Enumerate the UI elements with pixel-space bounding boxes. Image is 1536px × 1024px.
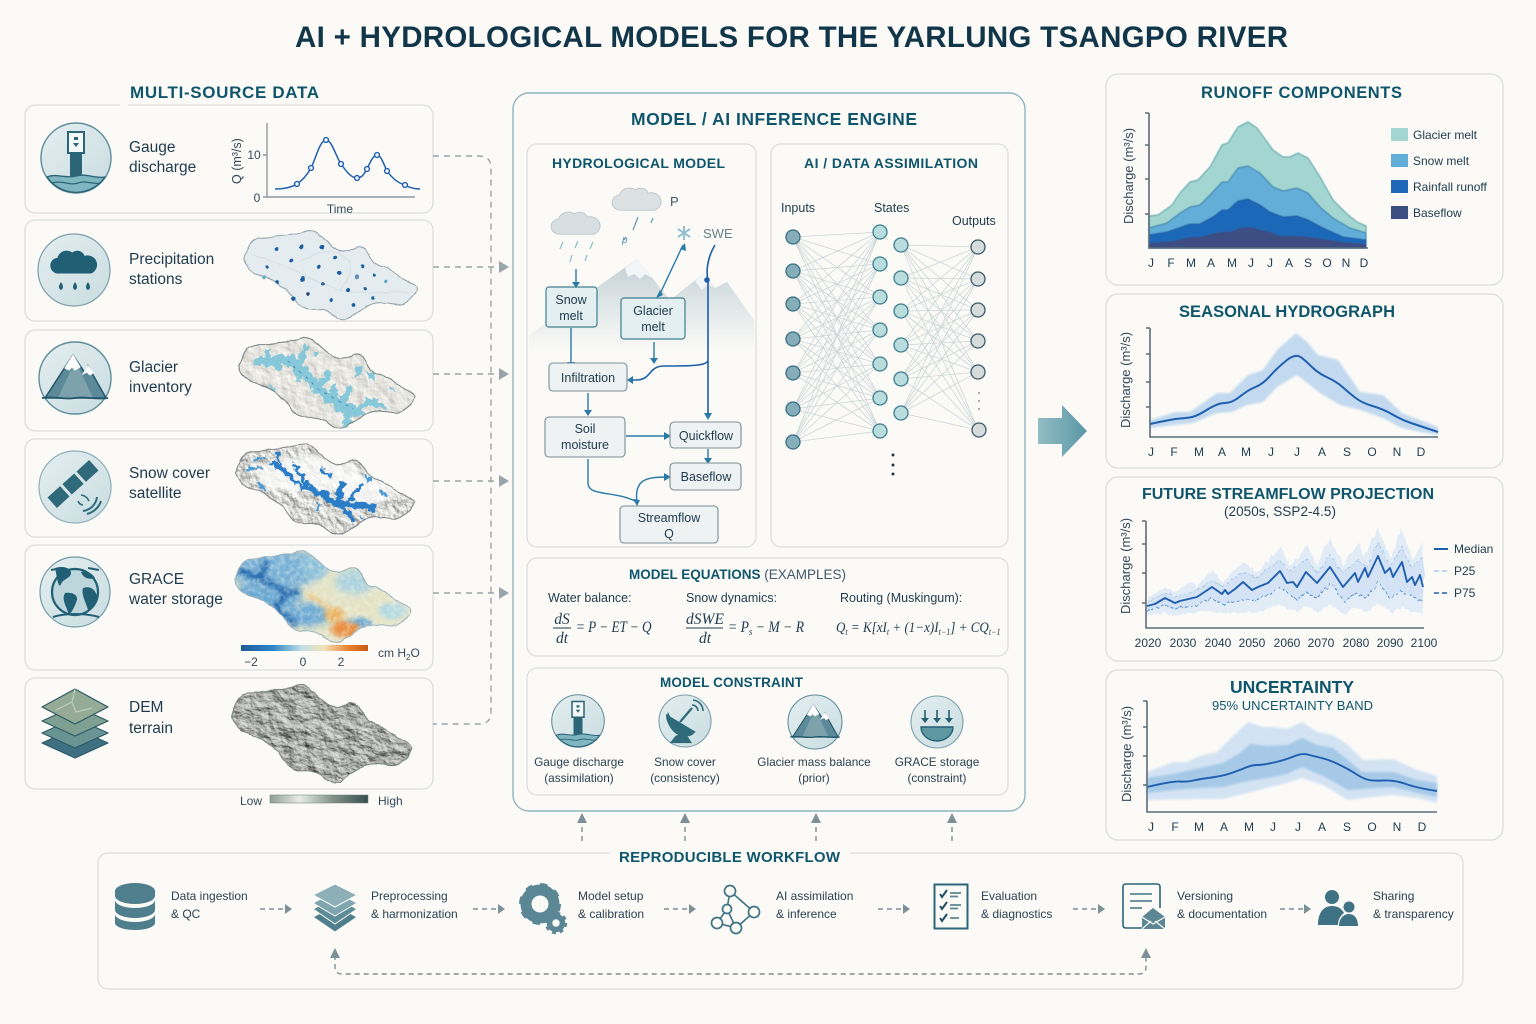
panel: uncertainty (1106, 670, 1503, 840)
chart: uncertainty bands: M (1244, 820, 1254, 834)
chart: projection: 2090 (1377, 636, 1404, 650)
chart: hydrograph with band: S (1343, 445, 1351, 459)
box: streamflow: Streamflow (638, 511, 700, 525)
box: baseflow: Baseflow (681, 470, 732, 484)
chart: stacked runoff area: N (1342, 256, 1350, 270)
subtitle: band: 95% UNCERTAINTY BAND (1212, 698, 1373, 713)
arrow (1280, 904, 1311, 914)
label: snow cover satellite: satellite (129, 485, 182, 502)
step: data ingestion: Data ingestion (171, 889, 248, 903)
box: streamflow (620, 506, 718, 543)
legend: runoff: Baseflow (1413, 206, 1462, 220)
equation: routing: + (1−x)I (889, 619, 940, 636)
label: precipitation stations: Precipitation (129, 251, 214, 268)
step: versioning: Versioning (1177, 889, 1233, 903)
step: model setup: Model setup (578, 889, 643, 903)
label: inputs: Inputs (781, 201, 815, 215)
chart: stacked runoff area: O (1322, 256, 1332, 270)
constraint: glacier mass balance: (prior) (798, 771, 830, 785)
heading: equations: MODEL EQUATIONS (EXAMPLES) (629, 567, 846, 582)
chart: hydrograph with band: M (1241, 445, 1251, 459)
chart: uncertainty bands: A (1318, 820, 1326, 834)
heading: workflow: REPRODUCIBLE WORKFLOW (619, 849, 841, 866)
chart: hydrograph with band: N (1393, 445, 1401, 459)
chart: uncertainty bands: M (1194, 820, 1204, 834)
constraint: gauge discharge (534, 695, 624, 785)
heading: future projection: FUTURE STREAMFLOW PROJECTION (1142, 486, 1434, 503)
box: quickflow (670, 422, 741, 448)
legend: runoff: Glacier melt (1413, 128, 1478, 142)
icon: cloud right (612, 188, 661, 210)
equation: routing: ] + CQ (949, 619, 989, 635)
label: small p: p (621, 235, 628, 246)
step: evaluation (934, 884, 1052, 928)
icon: globe (40, 557, 110, 627)
map: GRACE anomaly (234, 550, 412, 644)
icon: snowflake (678, 226, 690, 240)
label: DEM terrain: DEM (129, 699, 163, 716)
chart: hydrograph with band: J (1268, 445, 1274, 459)
legend: runoff: Rainfall runoff (1413, 180, 1487, 194)
constraint: GRACE storage: GRACE storage (895, 755, 979, 769)
panel: hydrological model (527, 144, 756, 547)
heading: hydrological model: HYDROLOGICAL MODEL (552, 155, 725, 171)
chart: hydrograph with band: F (1170, 445, 1178, 459)
colorbar: GRACE: 0 (300, 655, 307, 669)
step: preprocessing: & harmonization (371, 907, 458, 921)
chart: hydrograph with band: Discharge (m³/s) (1118, 332, 1133, 428)
equation: water balance (548, 591, 652, 647)
chart: stacked runoff area: A (1207, 256, 1215, 270)
card: DEM terrain (25, 678, 433, 789)
chart: stacked runoff area: Discharge (m³/s) (1121, 128, 1136, 224)
chart: uncertainty bands: J (1148, 820, 1154, 834)
colorbar: GRACE: −2 (244, 655, 258, 669)
constraint: gauge discharge: (assimilation) (544, 771, 614, 785)
box: infiltration (549, 363, 627, 391)
illustration: mountains (529, 259, 754, 352)
chart: projection: 2020 (1135, 636, 1162, 650)
equation: routing: Routing (Muskingum): (840, 591, 962, 605)
arrow: feedback loop (330, 948, 1151, 974)
chart: hydrograph with band: A (1318, 445, 1326, 459)
constraint: glacier mass balance (757, 695, 871, 785)
box: glacier melt: Glacier (633, 304, 673, 318)
legend: projection: P25 (1454, 564, 1476, 578)
chart: projection: 2080 (1343, 636, 1370, 650)
equation: routing: t (887, 627, 890, 637)
heading: multi-source data: MULTI-SOURCE DATA (130, 83, 319, 102)
equation: routing (836, 591, 1001, 637)
card: snow cover satellite (25, 439, 433, 540)
chart: stacked runoff area: J (1248, 256, 1254, 270)
legend: runoff: Snow melt (1413, 154, 1470, 168)
colorbar: GRACE (241, 645, 420, 669)
icon: cloud left (551, 212, 600, 234)
colorbar: GRACE: O (410, 646, 420, 660)
chart: projection: Discharge (m³/s) (1118, 518, 1133, 614)
box: snow melt (546, 287, 597, 327)
map: DEM (230, 683, 417, 788)
map: precipitation stations (244, 231, 417, 320)
chart: projection: 2100 (1411, 636, 1438, 650)
constraint: snow cover (650, 695, 720, 785)
chart: uncertainty bands: S (1343, 820, 1351, 834)
illustration: snow caps (625, 259, 714, 290)
chart: stacked runoff area (1121, 113, 1369, 270)
chart: gauge hydrograph: Q (m³/s) (230, 138, 244, 184)
chart: hydrograph with band: M (1194, 445, 1204, 459)
box: glacier melt (621, 298, 685, 339)
constraint: gauge discharge: Gauge discharge (534, 755, 624, 769)
equation: snow dynamics (686, 591, 804, 647)
equation: snow dynamics: Snow dynamics: (686, 591, 777, 605)
label: P: P (670, 194, 679, 209)
chart: stacked runoff area: S (1304, 256, 1312, 270)
flow arrowheads (567, 243, 712, 506)
label: GRACE water storage: GRACE (129, 571, 184, 588)
node: SWE junction (704, 277, 710, 283)
map: snow cover (234, 442, 419, 540)
panel: model equations (527, 558, 1008, 656)
chart: uncertainty bands: A (1220, 820, 1228, 834)
icon: satellite (39, 451, 111, 523)
equation: water balance: dt (556, 630, 569, 647)
map: glacier extent (237, 336, 420, 434)
chart: projection: 2050 (1239, 636, 1266, 650)
icon: rain left (560, 241, 593, 262)
title: AI + HYDROLOGICAL MODELS FOR THE YARLUNG TSANGPO RIVER (295, 21, 1288, 54)
chart: uncertainty bands: O (1367, 820, 1377, 834)
label: gauge discharge: discharge (129, 159, 196, 176)
equation: snow dynamics: s (749, 628, 753, 638)
step: versioning (1123, 884, 1267, 929)
chart: stacked runoff area: J (1148, 256, 1154, 270)
equation: routing: t (845, 627, 848, 637)
chart: hydrograph with band (1118, 328, 1438, 459)
label: snow cover satellite: Snow cover (129, 465, 210, 482)
label: glacier inventory: inventory (129, 379, 192, 396)
heading: seasonal hydrograph: SEASONAL HYDROGRAPH (1179, 303, 1395, 321)
arrows: workflow to engine (577, 813, 957, 841)
chart: uncertainty bands: D (1418, 820, 1427, 834)
chart: stacked runoff area: M (1186, 256, 1196, 270)
panel: model / AI inference engine (513, 93, 1025, 811)
chart: hydrograph with band: D (1417, 445, 1426, 459)
icon: mountains (39, 342, 111, 414)
box: baseflow (670, 463, 741, 490)
panel: seasonal hydrograph (1106, 294, 1503, 468)
arrow (473, 904, 505, 914)
step: model setup: & calibration (578, 907, 644, 921)
box: soil moisture (545, 417, 625, 457)
icon: rain right (624, 217, 653, 240)
chart: projection: 2070 (1308, 636, 1335, 650)
colorbar: GRACE: 2 (406, 653, 411, 662)
step: evaluation: & diagnostics (981, 907, 1052, 921)
icon: rain cloud (38, 234, 110, 306)
box: streamflow: Q (664, 527, 674, 541)
card: GRACE water storage (25, 545, 433, 670)
equation: snow dynamics: dt (699, 630, 712, 647)
step: sharing: & transparency (1373, 907, 1454, 921)
arrows: data to model connectors (433, 156, 509, 724)
chart: hydrograph with band: J (1148, 445, 1154, 459)
heading: inference engine: MODEL / AI INFERENCE ENGINE (631, 109, 917, 129)
chart: stacked runoff area: M (1227, 256, 1237, 270)
equation: water balance: Water balance: (548, 591, 632, 605)
step: data ingestion: & QC (171, 907, 201, 921)
colorbar: GRACE: cm H (378, 646, 406, 660)
card: glacier inventory (25, 330, 433, 434)
step: sharing (1318, 889, 1454, 926)
panel: runoff components (1106, 74, 1503, 285)
panel: reproducible workflow (98, 848, 1463, 989)
legend: elevation: Low (240, 794, 262, 808)
equation: routing: t−1 (989, 627, 1001, 637)
chart: uncertainty bands: J (1295, 820, 1301, 834)
icon: gauge (41, 123, 111, 193)
legend: projection (1434, 542, 1493, 600)
legend: projection: Median (1454, 542, 1493, 556)
label: outputs: Outputs (952, 214, 996, 228)
box: snow melt: Snow (555, 293, 587, 307)
chart: hydrograph with band: A (1218, 445, 1226, 459)
chart: uncertainty bands: F (1171, 820, 1179, 834)
chart: stacked runoff area: A (1285, 256, 1293, 270)
step: evaluation: Evaluation (981, 889, 1037, 903)
legend: elevation: High (378, 794, 403, 808)
chart: gauge hydrograph: 10 (247, 148, 261, 162)
equation: snow dynamics: − M − R (752, 619, 804, 636)
panel: AI / data assimilation (771, 144, 1008, 547)
step: preprocessing (313, 884, 458, 932)
equation: routing: t−1 (939, 627, 950, 637)
chart: stacked runoff area: F (1167, 256, 1175, 270)
heading: runoff components: RUNOFF COMPONENTS (1201, 84, 1402, 102)
constraint: snow cover: (consistency) (650, 771, 720, 785)
colorbar: GRACE: 2 (338, 655, 345, 669)
label: states: States (874, 201, 909, 215)
equation: water balance: dS (554, 611, 570, 628)
label: DEM terrain: terrain (129, 720, 173, 737)
card: precipitation stations (25, 220, 433, 321)
box: glacier melt: melt (641, 320, 665, 334)
equation: routing: Q (836, 619, 845, 635)
chart: projection: 2040 (1205, 636, 1232, 650)
label: glacier inventory: Glacier (129, 359, 178, 376)
box: quickflow: Quickflow (679, 429, 734, 443)
heading: uncertainty: UNCERTAINTY (1230, 677, 1354, 697)
arrow (664, 904, 696, 914)
constraint: GRACE storage (895, 696, 980, 785)
chart: stacked runoff area: D (1360, 256, 1369, 270)
icon: DEM layers (42, 689, 108, 758)
chart: uncertainty bands (1119, 701, 1437, 834)
chart: uncertainty bands: Discharge (m³/s) (1119, 706, 1134, 802)
chart: uncertainty bands: N (1393, 820, 1401, 834)
box: soil moisture: Soil (575, 422, 595, 436)
chart: hydrograph with band: J (1294, 445, 1300, 459)
label: precipitation stations: stations (129, 271, 183, 288)
legend: elevation (240, 794, 403, 808)
constraint: glacier mass balance: Glacier mass balance (757, 755, 871, 769)
chart: stacked runoff area: J (1267, 256, 1273, 270)
step: AI assimilation (712, 886, 853, 934)
subtitle: scenario: (2050s, SSP2-4.5) (1224, 504, 1336, 519)
equation: snow dynamics: dSWE (686, 611, 724, 628)
label: gauge discharge: Gauge (129, 139, 176, 156)
box: snow melt: melt (559, 309, 583, 323)
panel: future streamflow projection (1106, 477, 1503, 661)
constraint: GRACE storage: (constraint) (907, 771, 967, 785)
chart: projection: 2060 (1274, 636, 1301, 650)
arrow: model to outputs (1038, 405, 1087, 457)
neural network (786, 225, 986, 476)
constraint: snow cover: Snow cover (654, 755, 716, 769)
arrow (260, 904, 292, 914)
box: infiltration: Infiltration (561, 371, 615, 385)
label: GRACE water storage: water storage (128, 591, 223, 608)
step: data ingestion (115, 883, 248, 930)
step: AI assimilation: AI assimilation (776, 889, 853, 903)
arrow (878, 904, 910, 914)
equation: water balance: = P − ET − Q (576, 619, 652, 636)
chart: projection: 2030 (1170, 636, 1197, 650)
chart: uncertainty bands: J (1270, 820, 1276, 834)
chart: gauge hydrograph: Time (327, 202, 353, 216)
chart: gauge hydrograph: 0 (254, 191, 261, 205)
heading: constraint: MODEL CONSTRAINT (660, 675, 804, 690)
legend: projection: P75 (1454, 586, 1476, 600)
chart: hydrograph with band: O (1367, 445, 1377, 459)
legend: runoff (1391, 128, 1487, 220)
step: preprocessing: Preprocessing (371, 889, 448, 903)
arrow (1073, 904, 1105, 914)
chart: gauge hydrograph (230, 123, 420, 216)
flow arrows (571, 245, 715, 503)
label: SWE: SWE (703, 226, 733, 241)
step: versioning: & documentation (1177, 907, 1267, 921)
step: model setup (522, 886, 644, 932)
equation: snow dynamics: = P (728, 619, 749, 636)
equation: routing: = K[xI (848, 619, 888, 635)
panel: model constraint (527, 668, 1008, 795)
step: sharing: Sharing (1373, 889, 1414, 903)
box: soil moisture: moisture (561, 438, 609, 452)
chart: projection (1118, 518, 1438, 650)
panel: multi-source data (25, 83, 433, 808)
card: gauge discharge (25, 100, 433, 216)
heading: AI: AI / DATA ASSIMILATION (804, 155, 978, 171)
step: AI assimilation: & inference (776, 907, 837, 921)
